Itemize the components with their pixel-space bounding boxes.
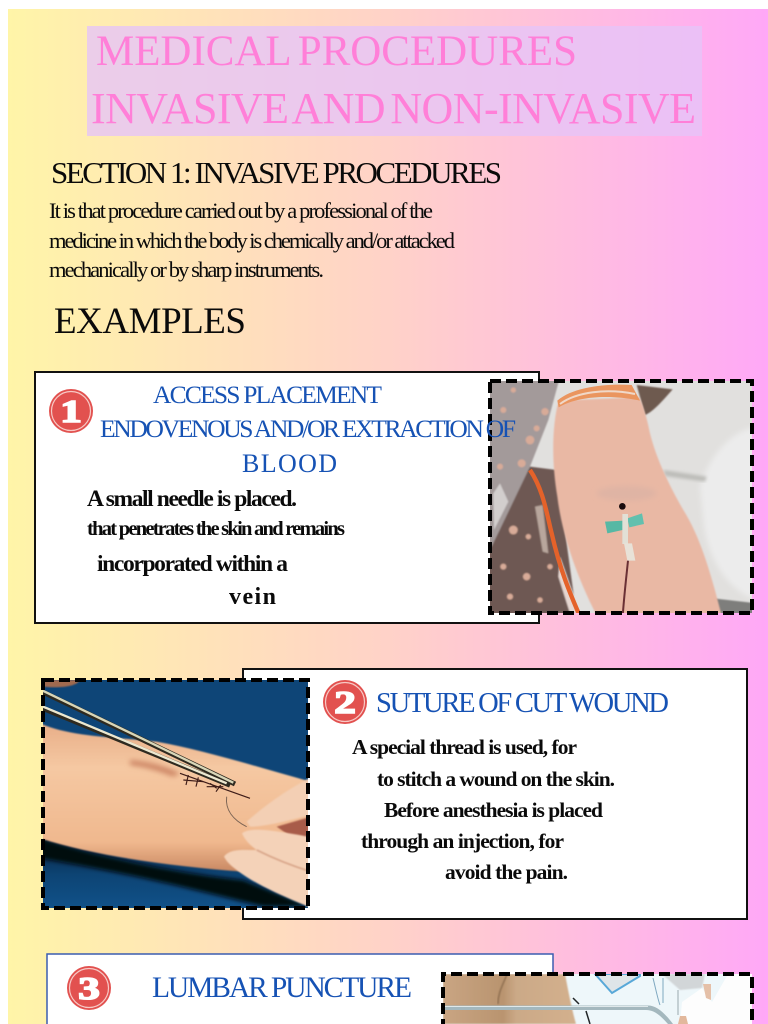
intro paragraph: It is that procedure carried out by a professional of the xyxy=(49,198,433,223)
dashed frame: photo 1 xyxy=(490,381,752,613)
panel: card 2 background xyxy=(243,669,747,919)
card 1 heading: BLOOD xyxy=(242,449,337,478)
card 3 heading: LUMBAR PUNCTURE xyxy=(152,972,412,1004)
intro paragraph xyxy=(49,198,455,282)
card 2 description: Before anesthesia is placed xyxy=(384,798,603,822)
panel: card 3 background xyxy=(47,954,553,1024)
photo: lumbar puncture xyxy=(443,974,752,1024)
dashed frame: photo 3 xyxy=(443,974,752,1024)
badge: number 3: 3 xyxy=(78,971,100,1007)
card 1 description: incorporated within a xyxy=(97,551,288,577)
photo: suturing a wound xyxy=(43,680,308,908)
card 2 heading: SUTURE OF CUT WOUND xyxy=(376,688,669,719)
dashed frame: photo 2 xyxy=(43,680,308,908)
badge: number 1: 1 xyxy=(60,394,82,430)
card 1 description: A small needle is placed. xyxy=(87,486,297,512)
badge: number 3 xyxy=(67,966,111,1010)
card 1 text xyxy=(87,380,516,610)
card 2 description: to stitch a wound on the skin. xyxy=(377,767,615,791)
card 2 description xyxy=(352,735,615,884)
section heading: SECTION 1: INVASIVE PROCEDURES xyxy=(51,155,502,190)
badge: number 1 xyxy=(49,389,93,433)
title block: INVASIVE AND NON-INVASIVE xyxy=(91,84,696,133)
intro paragraph: medicine in which the body is chemically and/or attacked xyxy=(49,228,455,253)
card 1 description xyxy=(87,486,345,610)
card 1 heading xyxy=(100,380,516,478)
card 2 description: through an injection, for xyxy=(361,829,564,853)
title block xyxy=(87,26,702,136)
title block: MEDICAL PROCEDURES xyxy=(96,28,577,75)
card 2 description: A special thread is used, for xyxy=(352,735,577,759)
panel: card 1 background xyxy=(35,372,539,623)
card 1 heading: ACCESS PLACEMENT xyxy=(153,380,382,409)
badge: number 2 xyxy=(323,680,367,724)
card 2 text xyxy=(352,688,669,884)
card 1 description: vein xyxy=(229,584,276,610)
badge: number 2: 2 xyxy=(334,685,356,721)
card 1 description: that penetrates the skin and remains xyxy=(87,518,345,540)
photo: needle in arm xyxy=(490,381,752,613)
intro paragraph: mechanically or by sharp instruments. xyxy=(49,257,324,282)
card 1 heading: ENDOVENOUS AND/OR EXTRACTION OF xyxy=(100,414,516,443)
card 2 description: avoid the pain. xyxy=(445,860,568,884)
examples heading: EXAMPLES xyxy=(54,301,246,342)
